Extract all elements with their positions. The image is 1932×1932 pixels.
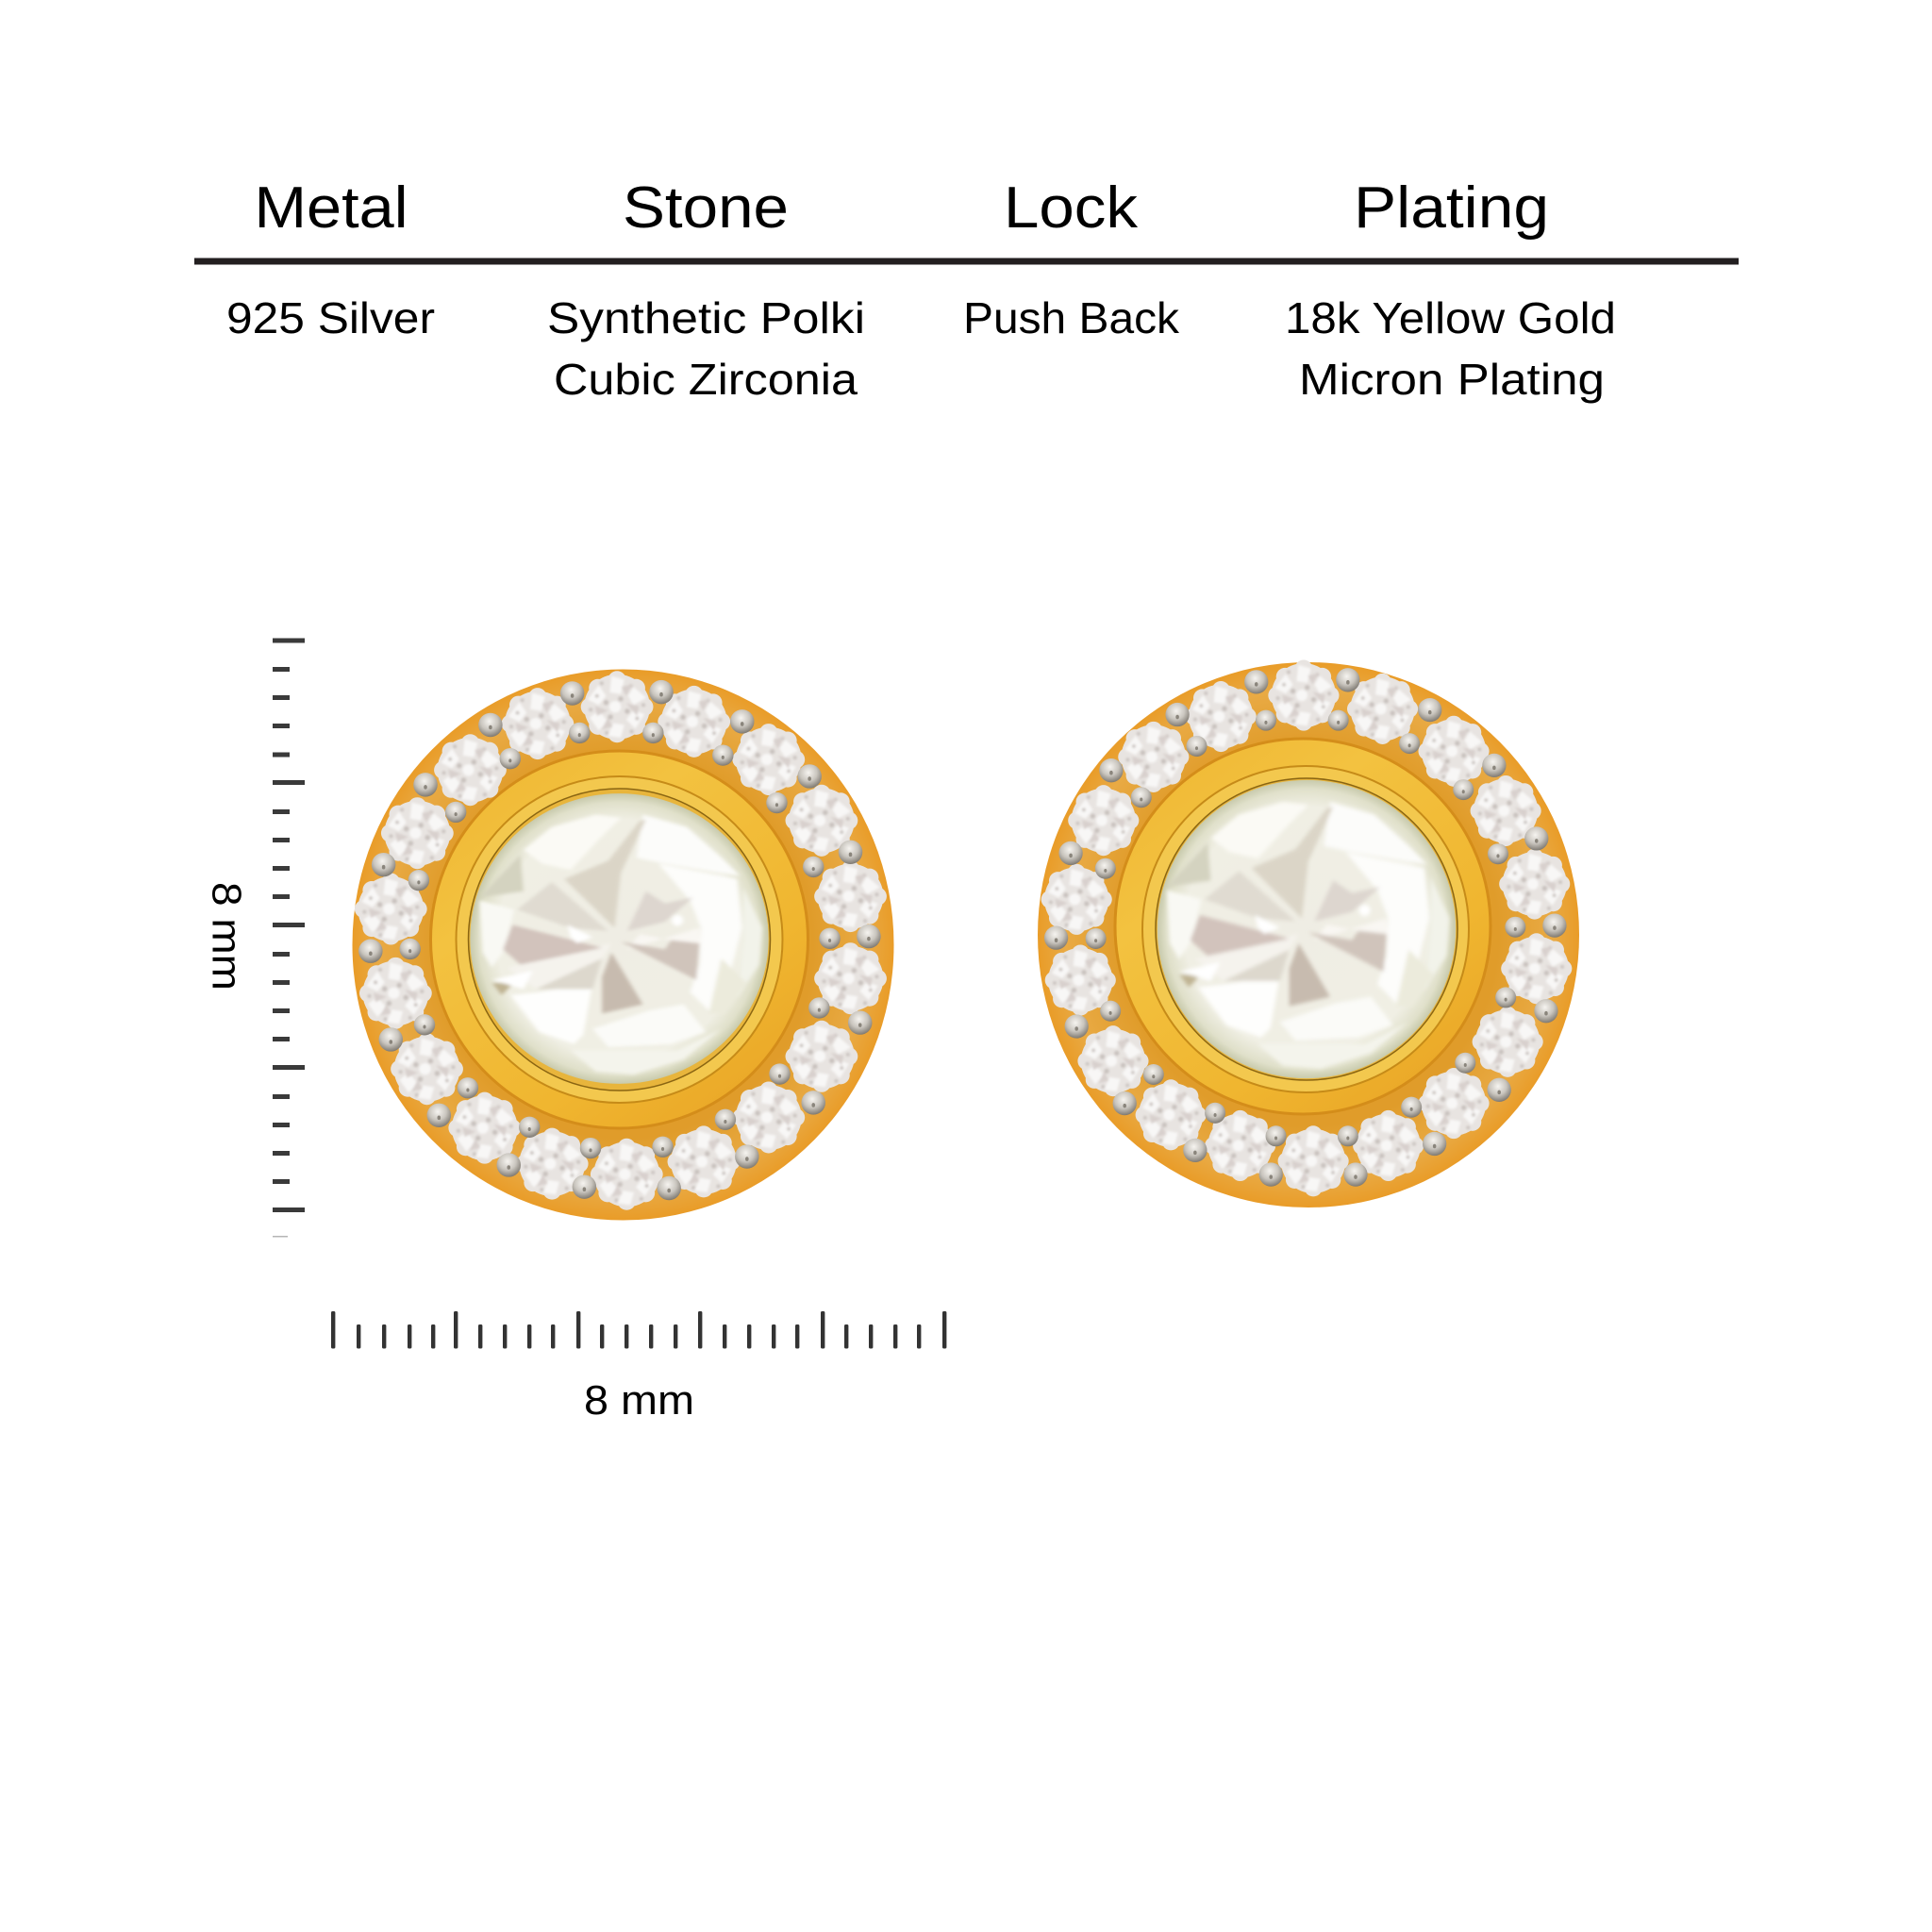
- value: lock: Push Back: [963, 293, 1180, 342]
- gold base plate: [353, 670, 894, 1221]
- value: plating: Micron Plating: [1299, 355, 1605, 404]
- heading: Lock: Lock: [1004, 175, 1139, 241]
- gold bezel: [430, 751, 808, 1128]
- label: horizontal 8 mm: 8 mm: [584, 1377, 694, 1424]
- value: plating: [1285, 293, 1616, 404]
- horizontal ruler: [331, 1311, 946, 1349]
- earring: left: [353, 670, 894, 1221]
- heading: Metal: Metal: [255, 175, 408, 241]
- specification table: [194, 175, 1739, 404]
- gold base plate: [1038, 662, 1579, 1208]
- polki centre stone: [470, 793, 769, 1084]
- earring: right: [1038, 660, 1579, 1208]
- label: vertical 8 mm: 8 mm: [204, 882, 249, 991]
- polki centre stone: [1158, 780, 1456, 1078]
- value: stone: Cubic Zirconia: [554, 355, 858, 404]
- table rule: [194, 258, 1739, 264]
- value: plating: 18k Yellow Gold: [1285, 293, 1616, 342]
- gold bezel: [1115, 739, 1491, 1114]
- vertical ruler: [273, 638, 305, 1238]
- value: stone: [547, 293, 865, 404]
- heading: Plating: Plating: [1354, 175, 1549, 241]
- halo of cubic zirconia stones: [1041, 660, 1572, 1196]
- value: stone: Synthetic Polki: [547, 293, 865, 342]
- value: metal: 925 Silver: [226, 293, 435, 342]
- halo of cubic zirconia stones: [355, 671, 887, 1210]
- heading: Stone: Stone: [623, 175, 789, 241]
